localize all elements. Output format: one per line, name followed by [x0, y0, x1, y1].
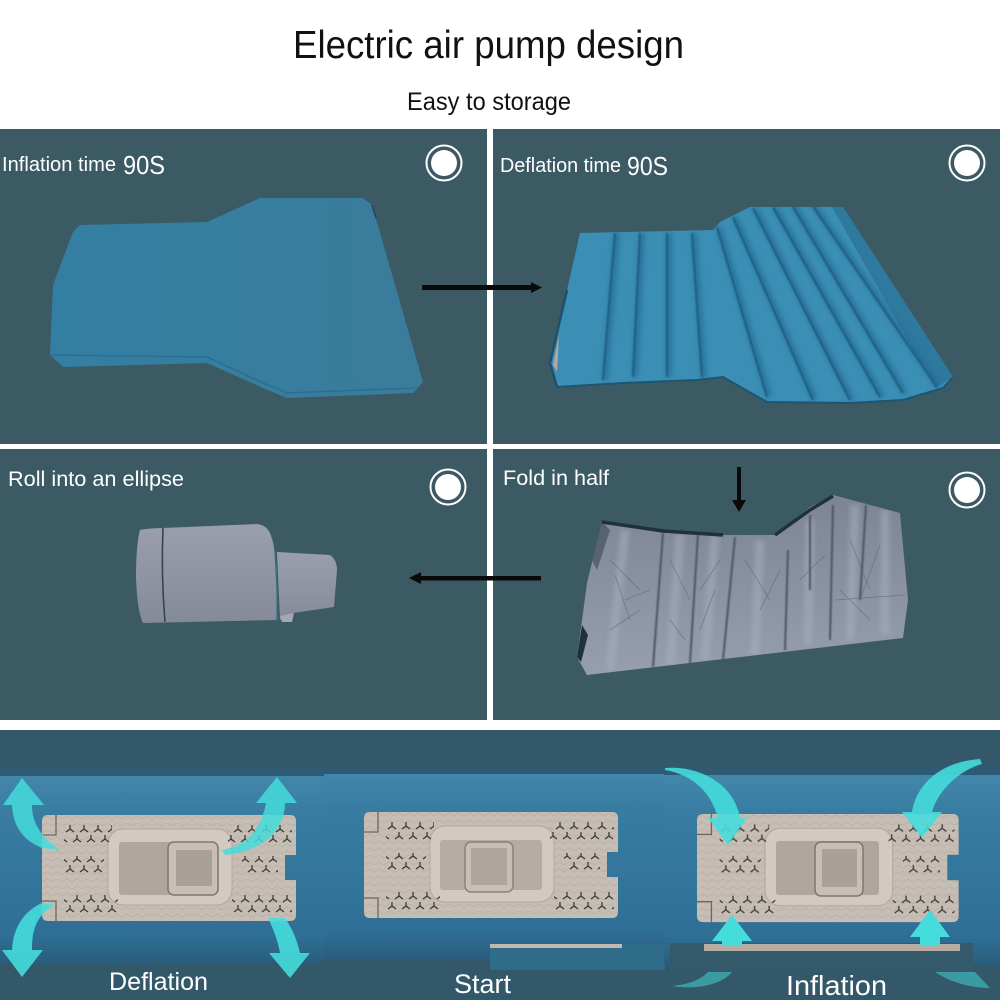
panel: valve deflation, start and inflation states: [0, 730, 1000, 1000]
illustration: mattress folded in half: [577, 495, 908, 675]
arrow: deflation lower right: [268, 918, 310, 978]
illustration: deflated ridged mattress: [550, 205, 953, 403]
label: deflation: Deflation: [109, 968, 208, 996]
icon: radio marker: [950, 146, 984, 180]
beige strip below the mat: [490, 944, 622, 948]
icon: radio marker: [430, 470, 466, 504]
label: start: Start: [454, 969, 511, 999]
panel: deflated mattress: [493, 129, 1000, 444]
pump valve plate: [42, 815, 296, 921]
panel: folded mattress: [493, 449, 1000, 720]
main title: Electric air pump design: [293, 24, 684, 67]
arrow: inflation upper right: [902, 759, 982, 838]
heading: inflation time: 90S: [123, 150, 165, 180]
arrow: deflation upper right: [222, 777, 297, 855]
heading: inflation time: Inflation time: [2, 154, 116, 176]
arrow: inflation upper left: [665, 768, 747, 845]
arrow: deflation lower left: [2, 903, 55, 977]
state: start: [324, 766, 665, 999]
heading: deflation time: 90S: [627, 151, 668, 181]
illustration: rolled mattress: [136, 524, 337, 623]
arrow: inflation lower left: [672, 915, 752, 987]
icon: radio marker: [426, 146, 462, 180]
icon: radio marker: [950, 472, 984, 508]
lower strip: [670, 943, 973, 972]
state: deflation: [0, 766, 324, 996]
illustration: flat inflated mattress: [50, 198, 423, 398]
heading: deflation time: Deflation time: [500, 155, 621, 177]
arrow: inflated to deflated: [422, 282, 542, 293]
arrow: deflated to folded: [732, 467, 746, 512]
arrow: folded to rolled: [409, 572, 541, 584]
panel: rolled mattress: [0, 449, 487, 720]
subtitle: Easy to storage: [407, 88, 571, 116]
arrow: deflation upper left: [3, 778, 60, 850]
heading: deflation time: [500, 151, 668, 181]
heading: roll into an ellipse: Roll into an ellipse: [8, 468, 184, 491]
arrow: inflation lower right: [910, 910, 990, 988]
panel: inflated mattress: [0, 129, 487, 444]
heading: fold in half: Fold in half: [503, 467, 609, 490]
pump valve plate: [364, 812, 618, 918]
heading: inflation time: [2, 150, 165, 180]
state: inflation: [664, 759, 1000, 1000]
pump valve plate: [697, 814, 959, 922]
